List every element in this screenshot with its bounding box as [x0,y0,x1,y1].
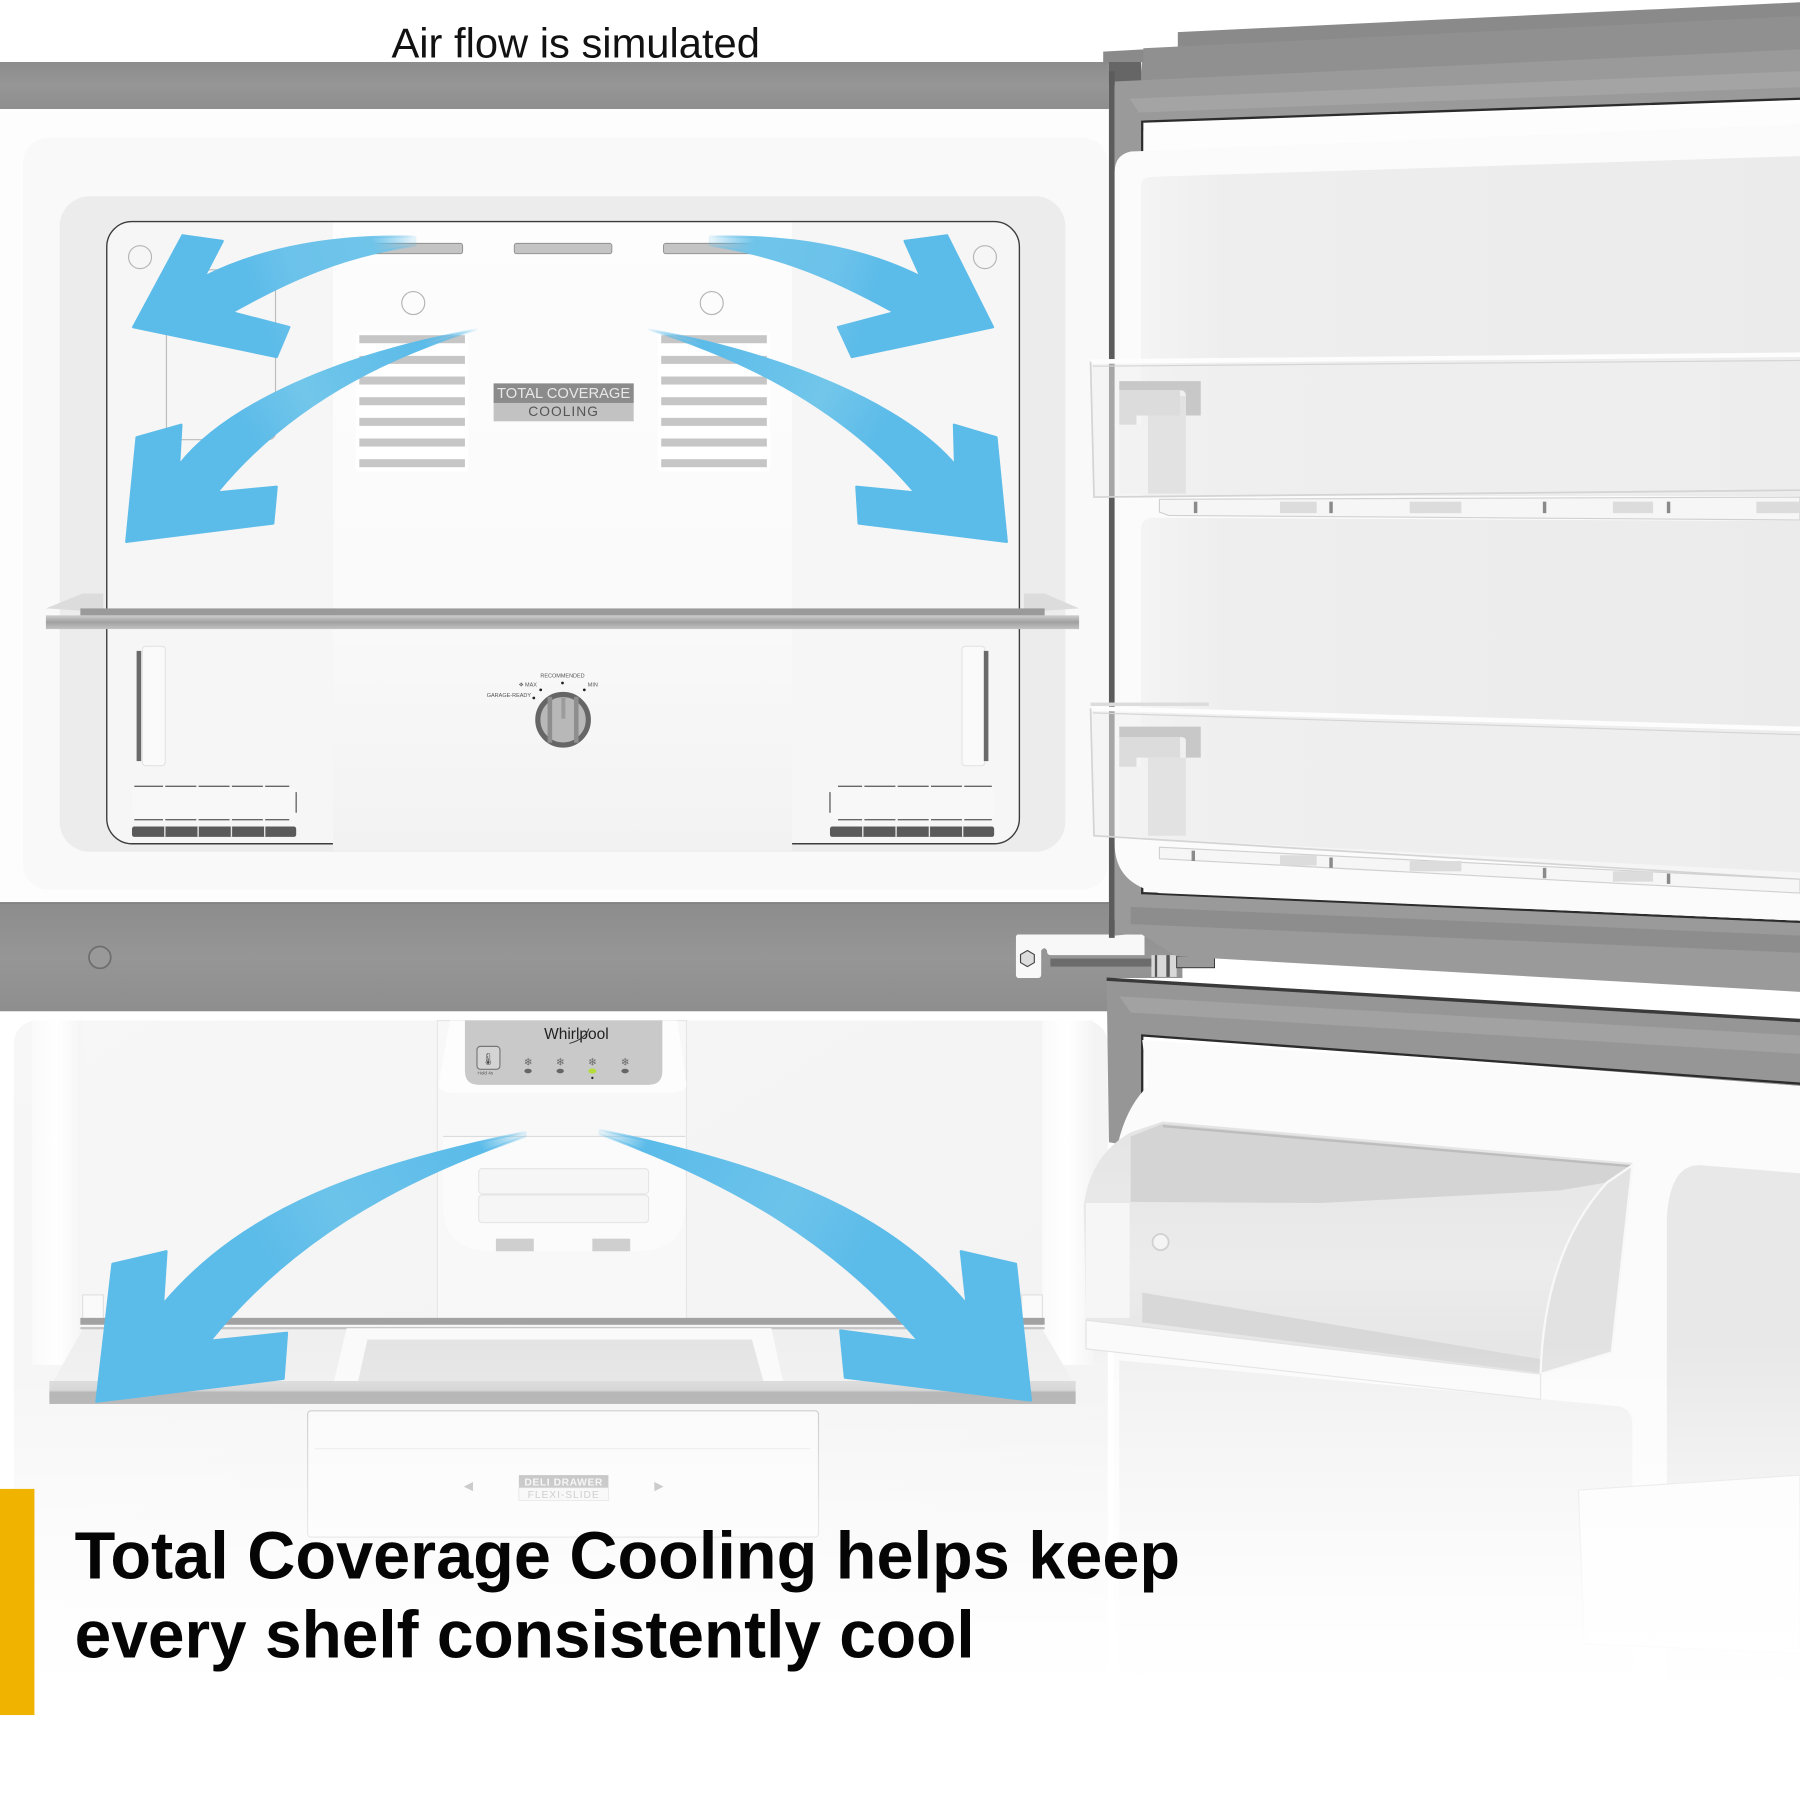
left handle slot [137,646,165,766]
lower door bin [1091,703,1800,893]
right side recess [1667,1165,1800,1722]
screw covers [129,246,996,315]
thin outline rectangle [166,270,276,440]
top air vents [367,243,760,254]
wire shelf [46,593,1079,629]
upper door bin [1091,352,1800,520]
arrow: middle left air flow [126,329,476,542]
lower door recess below lid [1119,1360,1632,1722]
control panel: Whirlpool [544,1026,609,1043]
upper compartment interior [0,109,1109,902]
door top edge [1140,16,1800,83]
white fade over bottom [0,1343,1800,1800]
lower air duct cover [443,1136,685,1251]
middle gray cabinet band [0,902,1182,1011]
headline: every shelf consistently cool [75,1599,975,1673]
top door assembly [1091,2,1800,992]
side columns [32,1021,1093,1365]
lower compartment interior [0,1011,1109,1722]
yellow accent bar [0,1489,34,1715]
control panel: ❄ [556,1057,565,1068]
door liner [1115,124,1800,921]
badge: total coverage cooling: COOLING [528,404,599,419]
gasket highlight [1130,71,1800,112]
deli drawer: DELI DRAWER [524,1477,603,1488]
crisper lid [1084,1122,1632,1399]
upper door recess [1141,156,1800,496]
door inner white panel [1143,103,1800,921]
control panel: Hold 4s [478,1070,494,1075]
arrow: top right air flow [709,235,993,357]
title: air flow note: Air flow is simulated [391,20,760,66]
temperature knob: MIN [588,682,598,688]
control panel [439,1021,686,1093]
arrow: middle right air flow [649,329,1007,542]
recessed back wall [60,196,1065,852]
top door gasket [1115,49,1800,992]
headline [75,1519,1180,1673]
lower door gasket [1107,979,1800,1148]
arrow: top left air flow [133,235,416,357]
center duct column [437,1021,686,1321]
deli drawer: FLEXI-SLIDE [528,1490,600,1501]
lower door bin [1578,1475,1800,1653]
control panel: ❄ [588,1057,597,1068]
temperature knob: ✥ MAX [519,681,537,688]
deli drawer [308,1411,818,1537]
control panel: 🌡 [481,1052,496,1066]
door hinge [1016,934,1215,978]
control panel: ❄ [524,1057,532,1068]
lower door recess [1141,518,1800,872]
lower door assembly [1084,979,1800,1722]
badge: total coverage cooling [494,383,634,421]
bottom right vent [830,786,994,837]
back panel [107,222,1019,844]
top gray cabinet band [0,62,1109,109]
headline: Total Coverage Cooling helps keep [75,1519,1180,1593]
shelf side brackets [83,1295,1042,1322]
air duct cover [333,223,792,851]
control panel: ❄ [621,1057,629,1068]
right handle slot [962,646,988,766]
lower door liner [1114,1040,1800,1722]
badge: total coverage cooling: TOTAL COVERAGE [497,386,630,402]
temperature knob [487,673,598,745]
temperature knob: GARAGE-READY [487,693,531,699]
glass shelf [49,1318,1076,1404]
left louvers [356,332,468,472]
temperature knob: RECOMMENDED [540,673,585,679]
arrow: lower left air flow [96,1132,526,1402]
bottom left vent [132,786,296,837]
right louvers [658,332,770,472]
arrow: lower right air flow [599,1130,1031,1401]
